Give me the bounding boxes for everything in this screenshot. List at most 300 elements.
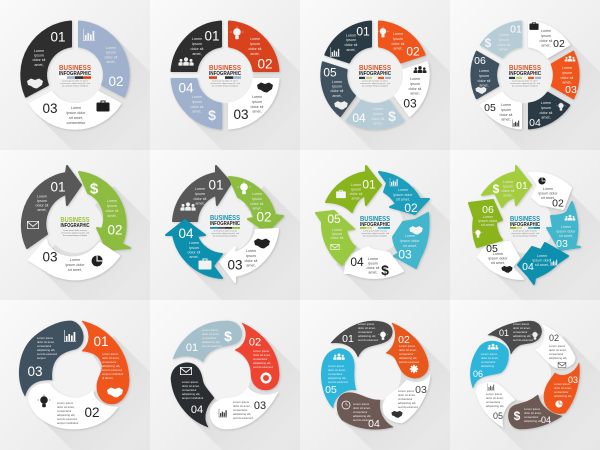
swirl 01: sed do eiusmod <box>513 338 533 342</box>
segment 01: Lorem <box>499 33 509 37</box>
swirl 06: 06 <box>473 369 483 379</box>
arrow 05 <box>478 242 523 279</box>
swirl 01: Lorem ipsum <box>358 322 375 326</box>
swirl 01: adipisicing elit, <box>102 364 120 368</box>
arrow 01: Lorem <box>351 183 361 187</box>
arrow 04 <box>345 247 403 278</box>
arrow 03: 03 <box>556 238 568 250</box>
swirl 04: consectetur <box>182 388 197 392</box>
arrow 04: ipsum dolor <box>532 258 552 262</box>
swirl 01 <box>82 321 129 404</box>
swirl 01: 01 <box>342 333 354 345</box>
arrow 03: Lorem <box>246 249 256 253</box>
segment 03: ipsum <box>562 71 572 75</box>
swirl 03: adipisicing elit, <box>233 412 251 416</box>
swirl 03 <box>19 321 83 396</box>
segment 05: 05 <box>323 66 337 80</box>
segment 01: Lorem <box>346 34 356 38</box>
swirl 01 <box>173 321 242 362</box>
arrow 04: amet, <box>368 270 378 274</box>
segment 03: 03 <box>42 101 58 116</box>
segment 03: ipsum <box>252 100 262 104</box>
segment 01: 01 <box>50 30 66 44</box>
swirl 03: consectetur <box>233 408 248 412</box>
swirl 02: adipisicing elit, <box>57 413 75 417</box>
arrow 02: ipsum dolor <box>393 193 413 197</box>
swirl 03: adipisicing elit, <box>37 348 55 352</box>
panel: four swirl segments <box>150 300 300 450</box>
segment 01: amet, <box>34 63 44 67</box>
arrow 02 <box>379 172 429 215</box>
center title: INFOGRAPHIC <box>59 71 91 77</box>
arrow 04: 04 <box>178 226 194 241</box>
segment 05: ipsum <box>501 108 511 112</box>
center title <box>210 213 240 237</box>
segment 06: Lorem <box>479 69 489 73</box>
arrow 03: amet, <box>246 264 256 268</box>
swirl 01: 01 <box>499 328 509 338</box>
segment 06: 06 <box>474 55 486 67</box>
segment 02: ipsum <box>541 34 551 38</box>
swirl 03: sed do eiusmod <box>37 352 57 356</box>
panel: five arrows <box>300 150 450 300</box>
arrow 05: 05 <box>327 212 341 226</box>
swirl 04: dolor sit amet, <box>524 411 542 415</box>
swirl 03: Lorem ipsum <box>37 336 54 340</box>
swirl 04 <box>508 395 562 429</box>
swirl 03: dolor sit amet, <box>233 404 251 408</box>
segment 03: 03 <box>565 84 577 96</box>
swirl 03: consectetur <box>37 344 52 348</box>
arrow 01: ipsum <box>503 184 513 188</box>
center title: BUSINESS <box>360 214 390 223</box>
swirl 02: 02 <box>549 333 559 343</box>
swirl 02: Lorem ipsum <box>253 349 270 353</box>
arrow 05 <box>316 211 355 265</box>
arrow 04: Lorem <box>537 254 547 258</box>
segment 03: 03 <box>403 96 417 110</box>
swirl 03: sed do eiusmod <box>398 405 418 409</box>
swirl 03: adipisicing elit, <box>398 401 416 405</box>
swirl 04: 04 <box>368 418 380 430</box>
swirl 03: tempor <box>37 356 46 360</box>
arrow 03 <box>29 240 119 279</box>
swirl 01: Lorem ipsum <box>102 352 119 356</box>
swirl 03: dolor sit amet, <box>37 340 55 344</box>
segment 05: amet, <box>501 118 511 122</box>
segment 06 <box>471 52 498 98</box>
arrow 03: ipsum <box>246 254 256 258</box>
swirl 01: dolor sit amet, <box>358 326 376 330</box>
arrow 05: ipsum dolor <box>488 256 508 260</box>
segment 01: ipsum <box>499 38 509 42</box>
swirl 04: 04 <box>191 404 203 416</box>
swirl 03 <box>544 363 579 414</box>
swirl 01: sed do eiusmod <box>202 344 222 348</box>
segment 03: Lorem <box>562 66 572 70</box>
arrow 03: 03 <box>42 250 58 264</box>
arrow 01: amet, <box>351 196 361 200</box>
swirl 01: dolor sit amet, <box>513 326 531 330</box>
arrow 05: 05 <box>486 243 498 255</box>
arrow 01: $ <box>493 182 500 196</box>
swirl 05 <box>476 382 515 427</box>
swirl 03: dolor sit amet, <box>554 386 572 390</box>
segment 04: amet, <box>192 110 202 114</box>
arrow 02: sit amet, <box>541 196 555 200</box>
arrow 02: Lorem <box>398 188 408 192</box>
arrow 05: Lorem <box>493 252 503 256</box>
swirl 01: adipisicing elit, <box>513 334 531 338</box>
segment 01 <box>21 22 71 97</box>
swirl 02: adipisicing elit, <box>549 356 567 360</box>
swirl 04: Lorem ipsum <box>353 402 370 406</box>
swirl 01: $ <box>224 328 232 344</box>
arrow 02: Lorem <box>543 187 553 191</box>
center title: Lorem ipsum dolor sit amet, <box>62 80 88 82</box>
segment 01 <box>481 22 522 57</box>
arrow 02: amet, <box>107 214 117 218</box>
arrow 06: sit amet, <box>481 223 495 227</box>
swirl 03 <box>210 387 278 429</box>
segment 03: amet, <box>410 92 420 96</box>
segment 06: ipsum <box>479 74 489 78</box>
center title: BUSINESS <box>210 213 240 222</box>
center title: INFOGRAPHIC <box>510 222 540 228</box>
swirl 04: Lorem ipsum <box>524 407 541 411</box>
swirl 02: consectetur <box>399 352 414 356</box>
swirl 02: sed do eiusmod <box>399 360 419 364</box>
swirl 05 <box>321 348 356 408</box>
swirl 03: 03 <box>254 400 266 412</box>
segment 01: 01 <box>356 24 370 38</box>
segment 02: dolor sit <box>540 39 552 43</box>
segment 04: 04 <box>352 111 366 125</box>
segment 03 <box>229 79 278 128</box>
arrow 03: ipsum dolor <box>556 230 576 234</box>
segment 02: ipsum <box>250 42 260 46</box>
center title: BUSINESS <box>509 63 541 72</box>
swirl 01: adipisicing elit, <box>202 340 220 344</box>
swirl 02: 02 <box>84 405 100 420</box>
center title: do eiusmod tempor incididunt <box>62 84 88 87</box>
segment 02: dolor sit <box>249 47 261 51</box>
center title: BUSINESS <box>59 63 91 72</box>
center title: INFOGRAPHIC <box>509 71 541 77</box>
arrow 04: Lorem <box>368 257 378 261</box>
arrow 01: amet, <box>503 194 513 198</box>
segment 02: 02 <box>406 44 420 58</box>
segment 04: dolor sit <box>191 105 203 109</box>
panel: three segment ring <box>0 0 150 150</box>
segment 04: amet, <box>541 116 551 120</box>
segment 03: Lorem <box>71 106 81 110</box>
segment 04: 04 <box>178 80 194 96</box>
arrow 02: ipsum dolor <box>538 192 558 196</box>
center title: consectetur adipisicing elit, sed <box>361 232 389 235</box>
swirl 05: Lorem ipsum <box>328 364 345 368</box>
segment 02 <box>79 22 129 97</box>
arrow 05: sit amet, <box>491 261 505 265</box>
segment 03: sit amet, <box>69 116 83 120</box>
arrow 02: ipsum <box>252 197 262 201</box>
arrow 02 <box>79 172 130 250</box>
segment 01: dolor sit <box>498 43 510 47</box>
panel: three swirl segments <box>0 300 150 450</box>
segment 02: dolor sit <box>392 42 404 46</box>
arrow 03: sit amet, <box>403 244 417 248</box>
segment 01: amet, <box>499 48 509 52</box>
segment 03: amet, <box>252 110 262 114</box>
segment 01: dolor sit <box>33 58 45 62</box>
swirl 03: 03 <box>27 364 43 379</box>
swirl 04: adipisicing elit, <box>524 419 542 423</box>
arrow 03: Lorem <box>70 258 80 262</box>
swirl 03: dolor sit amet, <box>398 393 416 397</box>
segment 01: dolor sit <box>191 47 203 51</box>
segment 01: amet, <box>346 48 356 52</box>
arrow 05: dolor sit <box>331 236 343 240</box>
center title: BUSINESS <box>60 215 90 224</box>
segment 03: dolor sit <box>561 76 573 80</box>
panel: six arrows <box>450 150 600 300</box>
arrow 02: Lorem <box>252 192 262 196</box>
arrow 01: 01 <box>50 180 66 194</box>
segment 02: Lorem <box>541 29 551 33</box>
swirl 02: adipisicing elit, <box>253 361 271 365</box>
center title: do eiusmod tempor incididunt <box>63 234 87 237</box>
arrow 03: dolor sit <box>245 259 257 263</box>
arrow 02: 02 <box>256 210 272 224</box>
swirl 05: adipisicing elit, <box>328 376 346 380</box>
panel: six segment ring <box>450 0 600 150</box>
swirl 02: 02 <box>249 336 261 348</box>
segment 04: ipsum <box>541 106 551 110</box>
swirl 02: consectetur <box>57 409 72 413</box>
panel: four segment ring <box>150 0 300 150</box>
arrow 01: ipsum <box>351 188 361 192</box>
segment 03: dolor sit <box>251 105 263 109</box>
arrow 04: ipsum <box>368 262 378 266</box>
arrow 01: dolor sit <box>350 192 362 196</box>
segment 02: amet, <box>541 44 551 48</box>
center title: consectetur adipisicing elit, sed <box>211 232 239 235</box>
swirl 01: sed do eiusmod <box>102 368 122 372</box>
arrow 01: amet, <box>37 208 47 212</box>
center title <box>59 63 91 87</box>
arrow 02: 02 <box>552 198 564 210</box>
swirl 02: sed do eiusmod <box>253 365 273 369</box>
segment 03 <box>552 52 579 98</box>
swirl 02: adipisicing elit, <box>399 356 417 360</box>
segment 01 <box>172 22 221 71</box>
arrow 04: amet, <box>189 255 199 259</box>
center title: consectetur adipisicing elit, sed <box>360 82 390 85</box>
center title: BUSINESS <box>510 214 540 223</box>
segment 05: dolor sit <box>331 89 343 93</box>
center title: do eiusmod tempor incididunt <box>512 84 538 87</box>
arrow 02: $ <box>90 180 99 198</box>
segment 03: amet, <box>562 80 572 84</box>
segment 04: Lorem <box>541 101 551 105</box>
center title <box>209 63 241 87</box>
segment 04 <box>347 100 403 129</box>
segment 03: consectetur <box>66 121 86 125</box>
swirl 03: 03 <box>415 384 427 396</box>
arrow 01: dolor sit <box>502 189 514 193</box>
swirl 02 <box>29 384 118 429</box>
segment 04: 04 <box>529 117 541 129</box>
swirl 01: dolor sit amet, <box>102 356 120 360</box>
arrow 03: 03 <box>398 248 412 262</box>
swirl 05: Lorem ipsum <box>486 392 503 396</box>
segment 01: ipsum <box>192 42 202 46</box>
swirl 01: Lorem ipsum <box>202 328 219 332</box>
center title: INFOGRAPHIC <box>210 221 240 227</box>
arrow 01: ipsum <box>37 199 47 203</box>
segment 06: dolor sit <box>478 79 490 83</box>
panel: six swirl segments <box>450 300 600 450</box>
swirl 02: dolor sit amet, <box>57 405 75 409</box>
swirl 01 <box>331 321 392 357</box>
segment 01: ipsum <box>346 38 356 42</box>
swirl 03: Lorem ipsum <box>233 400 250 404</box>
arrow 06: ipsum dolor <box>478 219 498 223</box>
segment 03: ipsum dolor <box>66 111 86 115</box>
segment 02 <box>229 22 278 72</box>
swirl 03: consectetur <box>554 390 569 394</box>
swirl 05: 05 <box>325 384 337 396</box>
arrow 03: ipsum dolor <box>400 239 420 243</box>
segment 02: Lorem <box>106 46 116 50</box>
swirl 06: dolor sit amet, <box>481 356 499 360</box>
panel: five segment ring <box>300 0 450 150</box>
arrow 01: Lorem <box>503 180 513 184</box>
center title: BUSINESS <box>359 63 391 72</box>
swirl 02 <box>536 324 575 368</box>
swirl 02: sed do eiusmod <box>57 417 77 421</box>
swirl 01: ut labore <box>102 376 113 380</box>
segment 05 <box>321 62 355 116</box>
arrow 01: dolor sit <box>194 197 206 201</box>
swirl 05: dolor sit amet, <box>328 368 346 372</box>
arrow 03 <box>220 229 278 282</box>
arrow 01: dolor sit <box>36 204 48 208</box>
swirl 03 <box>383 375 430 423</box>
center title: Lorem ipsum dolor sit amet, <box>512 80 538 82</box>
segment 01: Lorem <box>192 37 202 41</box>
segment 02: amet, <box>393 46 403 50</box>
arrow 06 <box>469 200 502 247</box>
center title: Lorem ipsum dolor sit amet, <box>362 80 388 82</box>
segment 02: ipsum <box>393 37 403 41</box>
swirl 02: Lorem ipsum <box>57 401 74 405</box>
swirl 04 <box>171 363 214 427</box>
swirl 05: 05 <box>493 411 503 421</box>
swirl 05: sed do eiusmod <box>328 380 348 384</box>
swirl 02 <box>235 323 279 390</box>
swirl 03: consectetur <box>398 397 413 401</box>
arrow 01: Lorem <box>195 187 205 191</box>
arrow 01 <box>482 166 531 207</box>
center title: Lorem ipsum dolor sit amet, <box>213 230 237 232</box>
segment 06: amet, <box>479 84 489 88</box>
segment 02: amet, <box>250 52 260 56</box>
segment 03: 03 <box>233 107 249 122</box>
segment 01: 01 <box>510 24 522 36</box>
arrow 02: Lorem <box>107 199 117 203</box>
swirl 03: adipisicing elit, <box>554 394 572 398</box>
center title: BUSINESS <box>209 63 241 72</box>
swirl 04: 04 <box>541 415 551 425</box>
center title: do eiusmod tempor incididunt <box>362 84 388 87</box>
segment 04: ipsum <box>192 100 202 104</box>
swirl 01: consectetur <box>202 336 217 340</box>
segment 05: 05 <box>484 102 496 114</box>
segment 02 <box>378 22 425 62</box>
segment 03 <box>30 92 120 129</box>
segment 03: dolor sit <box>409 87 421 91</box>
arrow 04 <box>166 220 222 278</box>
segment 05: Lorem <box>501 103 511 107</box>
arrow 04: $ <box>381 262 389 278</box>
center title <box>510 214 540 237</box>
center title <box>60 217 90 236</box>
segment 03: Lorem <box>410 77 420 81</box>
arrow 04: Lorem <box>189 241 199 245</box>
arrow 01: 01 <box>208 178 224 192</box>
swirl 04: consectetur <box>353 410 368 414</box>
swirl 03: Lorem ipsum <box>554 382 571 386</box>
swirl 02 <box>386 323 428 378</box>
swirl 03: sed do eiusmod <box>233 416 253 420</box>
segment 02: ipsum <box>106 51 116 55</box>
swirl 06: Lorem ipsum <box>481 352 498 356</box>
segment 01: ipsum <box>34 54 44 58</box>
swirl 01: Lorem ipsum <box>513 322 530 326</box>
center title: do eiusmod tempor incididunt <box>212 84 238 87</box>
panel: five swirl segments <box>300 300 450 450</box>
swirl 02: tempor incididunt <box>57 421 79 425</box>
segment 01: Lorem <box>34 49 44 53</box>
segment 04 <box>529 93 569 129</box>
segment 05: ipsum <box>332 84 342 88</box>
arrow 02 <box>529 173 571 210</box>
panel: four arrows <box>150 150 300 300</box>
center title <box>359 63 391 87</box>
segment 04: dolor sit <box>540 111 552 115</box>
segment 04: Lorem <box>192 95 202 99</box>
segment 01 <box>325 22 371 62</box>
arrow 01 <box>326 166 381 212</box>
center title: do eiusmod tempor incididunt <box>213 234 237 237</box>
center title: Lorem ipsum dolor sit amet, <box>212 80 238 82</box>
arrow 02: sit amet, <box>396 198 410 202</box>
arrow 06: 06 <box>482 204 494 216</box>
center title: INFOGRAPHIC <box>360 222 390 228</box>
arrow 03: sit amet, <box>68 268 82 272</box>
arrow 04: 04 <box>522 261 534 273</box>
arrow 04 <box>518 243 568 284</box>
segment 04: dolor sit <box>372 117 384 121</box>
swirl 05: dolor sit amet, <box>486 396 504 400</box>
segment 02: Lorem <box>250 37 260 41</box>
segment 05 <box>481 93 521 128</box>
segment 03: Lorem <box>252 95 262 99</box>
center title <box>360 214 390 237</box>
arrow 02: amet, <box>252 206 262 210</box>
swirl 04: adipisicing elit, <box>353 414 371 418</box>
